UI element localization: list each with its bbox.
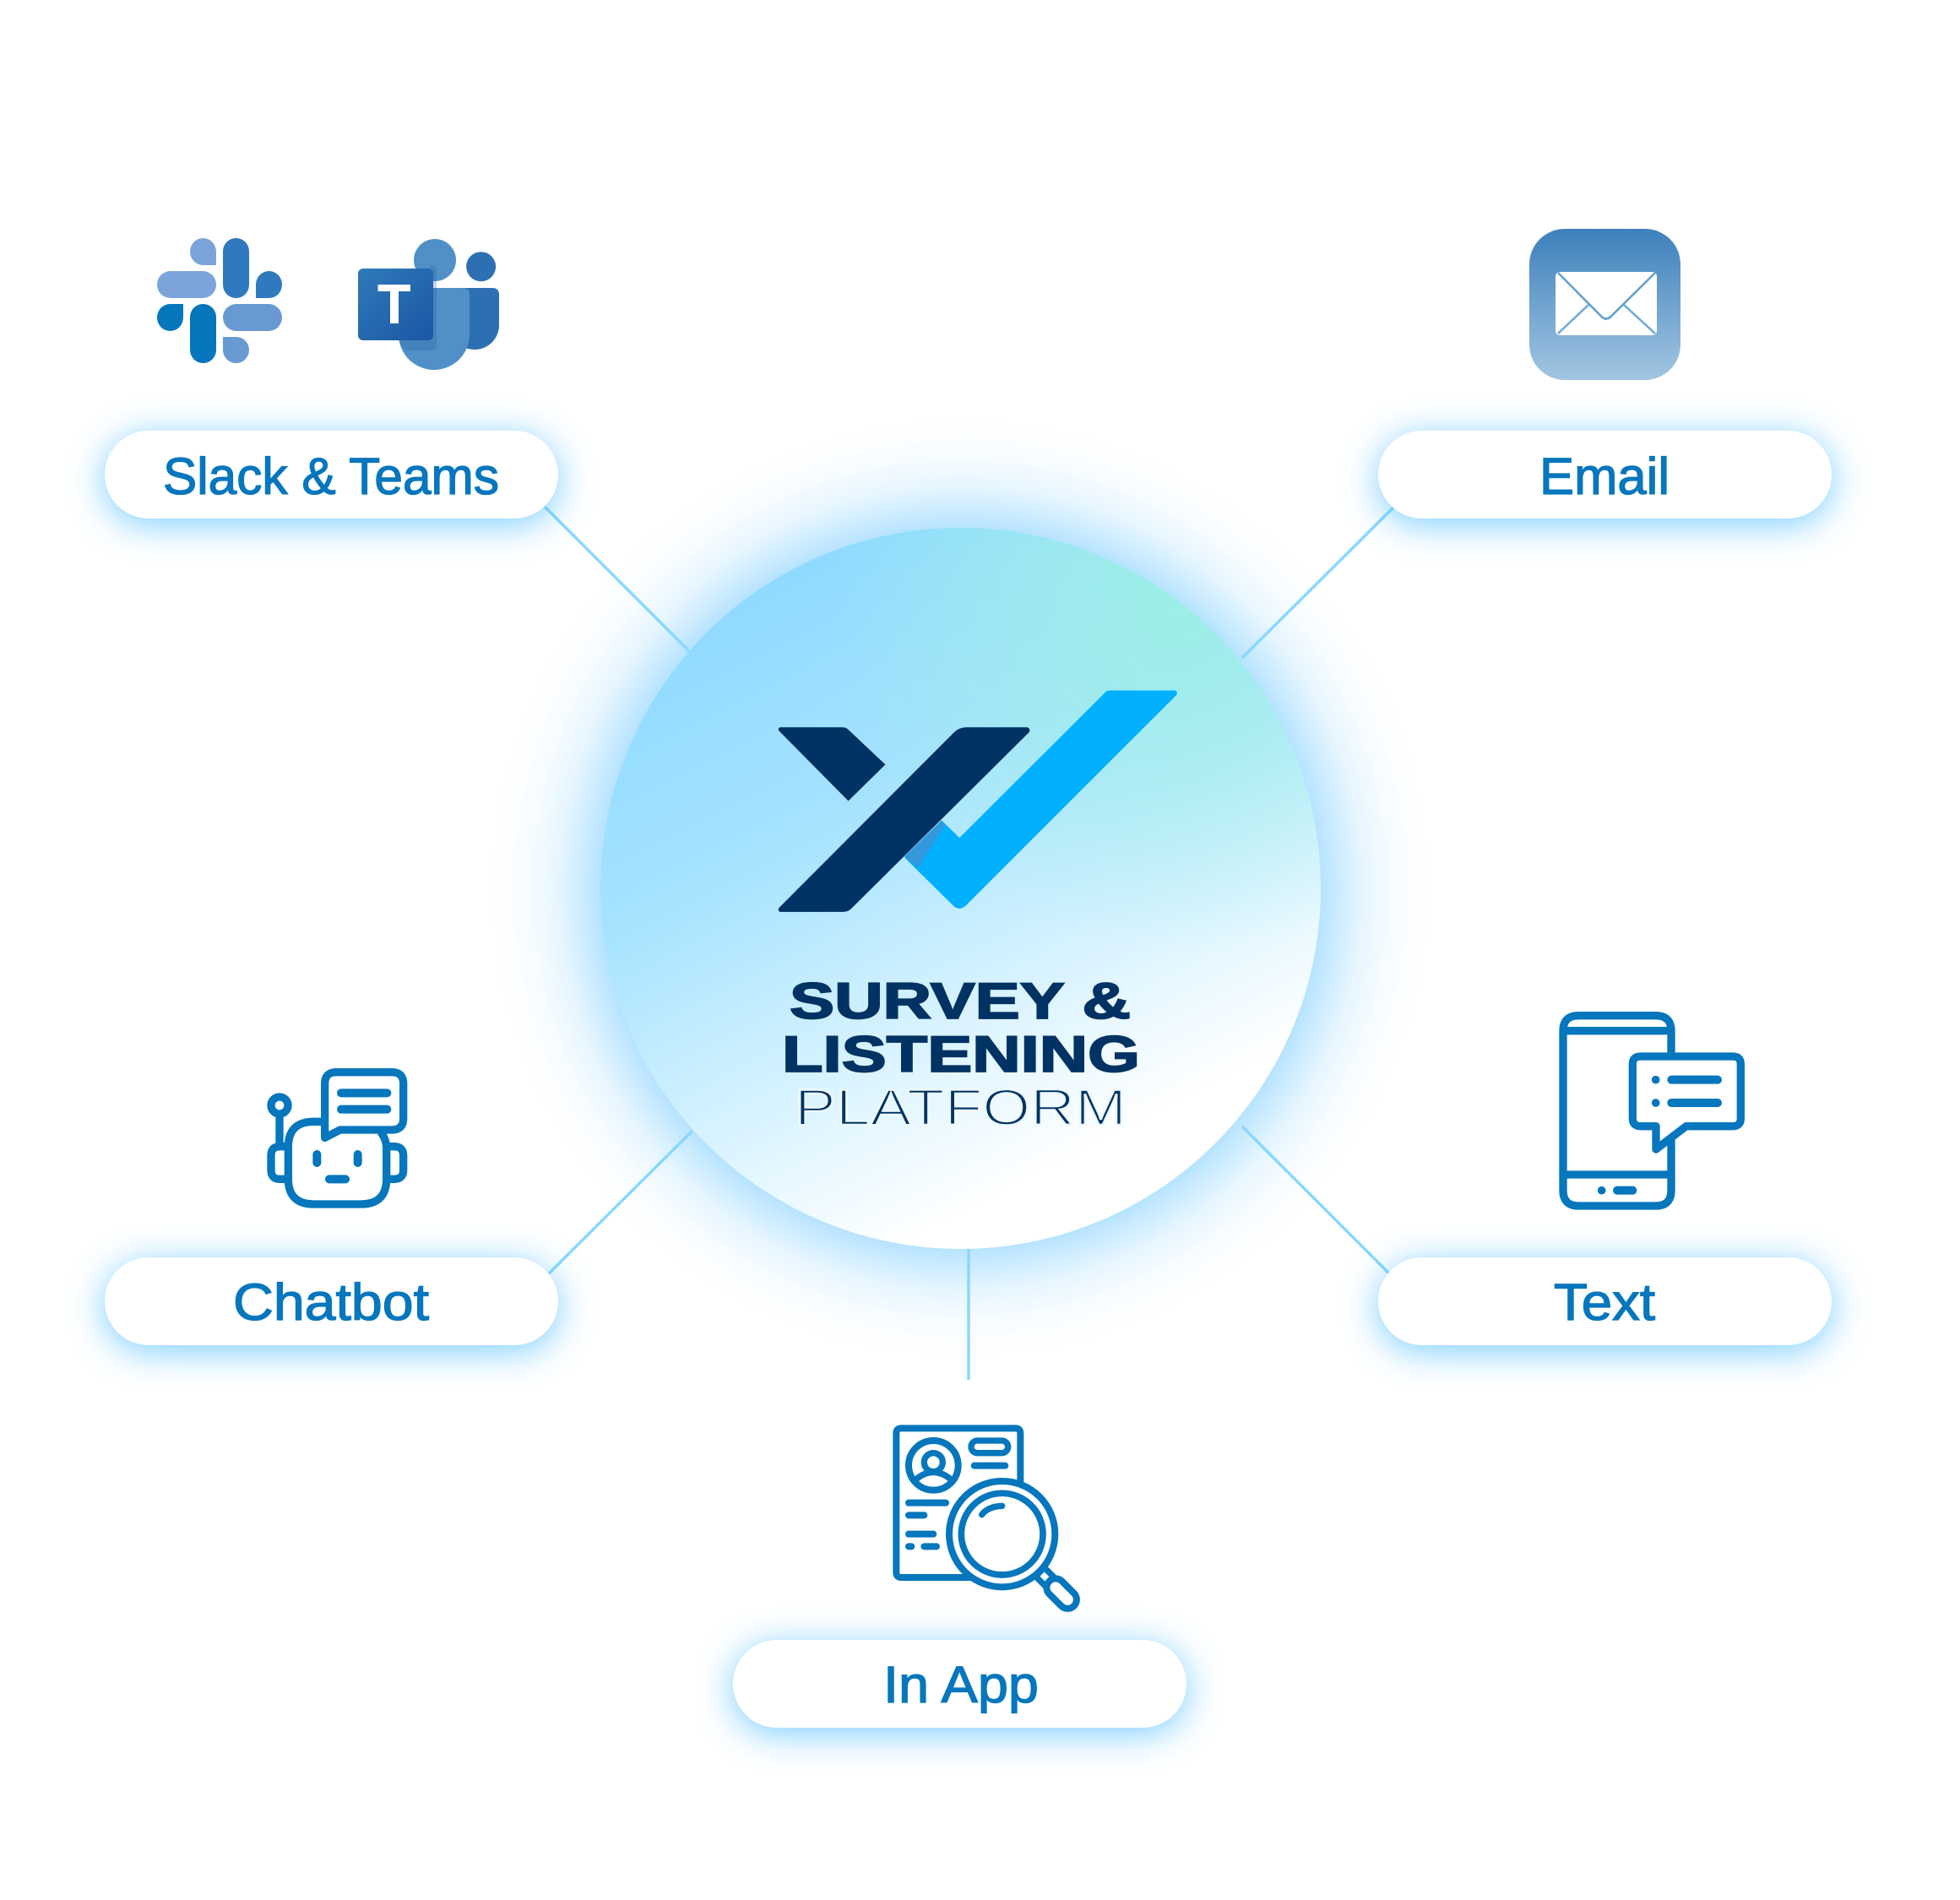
icon: email [1529, 229, 1680, 380]
icon: in-app magnifier over profile [893, 1425, 1080, 1612]
pill: Chatbot: Chatbot [233, 1273, 429, 1331]
icon: chatbot [267, 1068, 407, 1208]
pill: Slack & Teams [105, 431, 558, 518]
icon: phone text message [1559, 1012, 1745, 1210]
circle glow [482, 410, 1439, 1367]
platform title text: LISTENING [782, 1026, 1140, 1083]
icon: slack [157, 238, 282, 363]
pill: Slack & Teams: Slack & Teams [163, 448, 499, 505]
pill: Email: Email [1539, 448, 1670, 505]
pill: In App: In App [883, 1656, 1039, 1713]
pill: In App [733, 1640, 1186, 1728]
platform title text [782, 973, 1140, 1136]
platform title text: PLATFORM [795, 1079, 1127, 1136]
central circle [600, 528, 1321, 1249]
pill: Chatbot [105, 1257, 558, 1345]
logo mark [779, 691, 1177, 912]
pill: Email [1378, 431, 1832, 518]
pill: Text [1378, 1257, 1832, 1345]
pill: Text: Text [1554, 1273, 1655, 1331]
icon: teams [358, 239, 499, 370]
platform title text: SURVEY & [790, 973, 1131, 1029]
